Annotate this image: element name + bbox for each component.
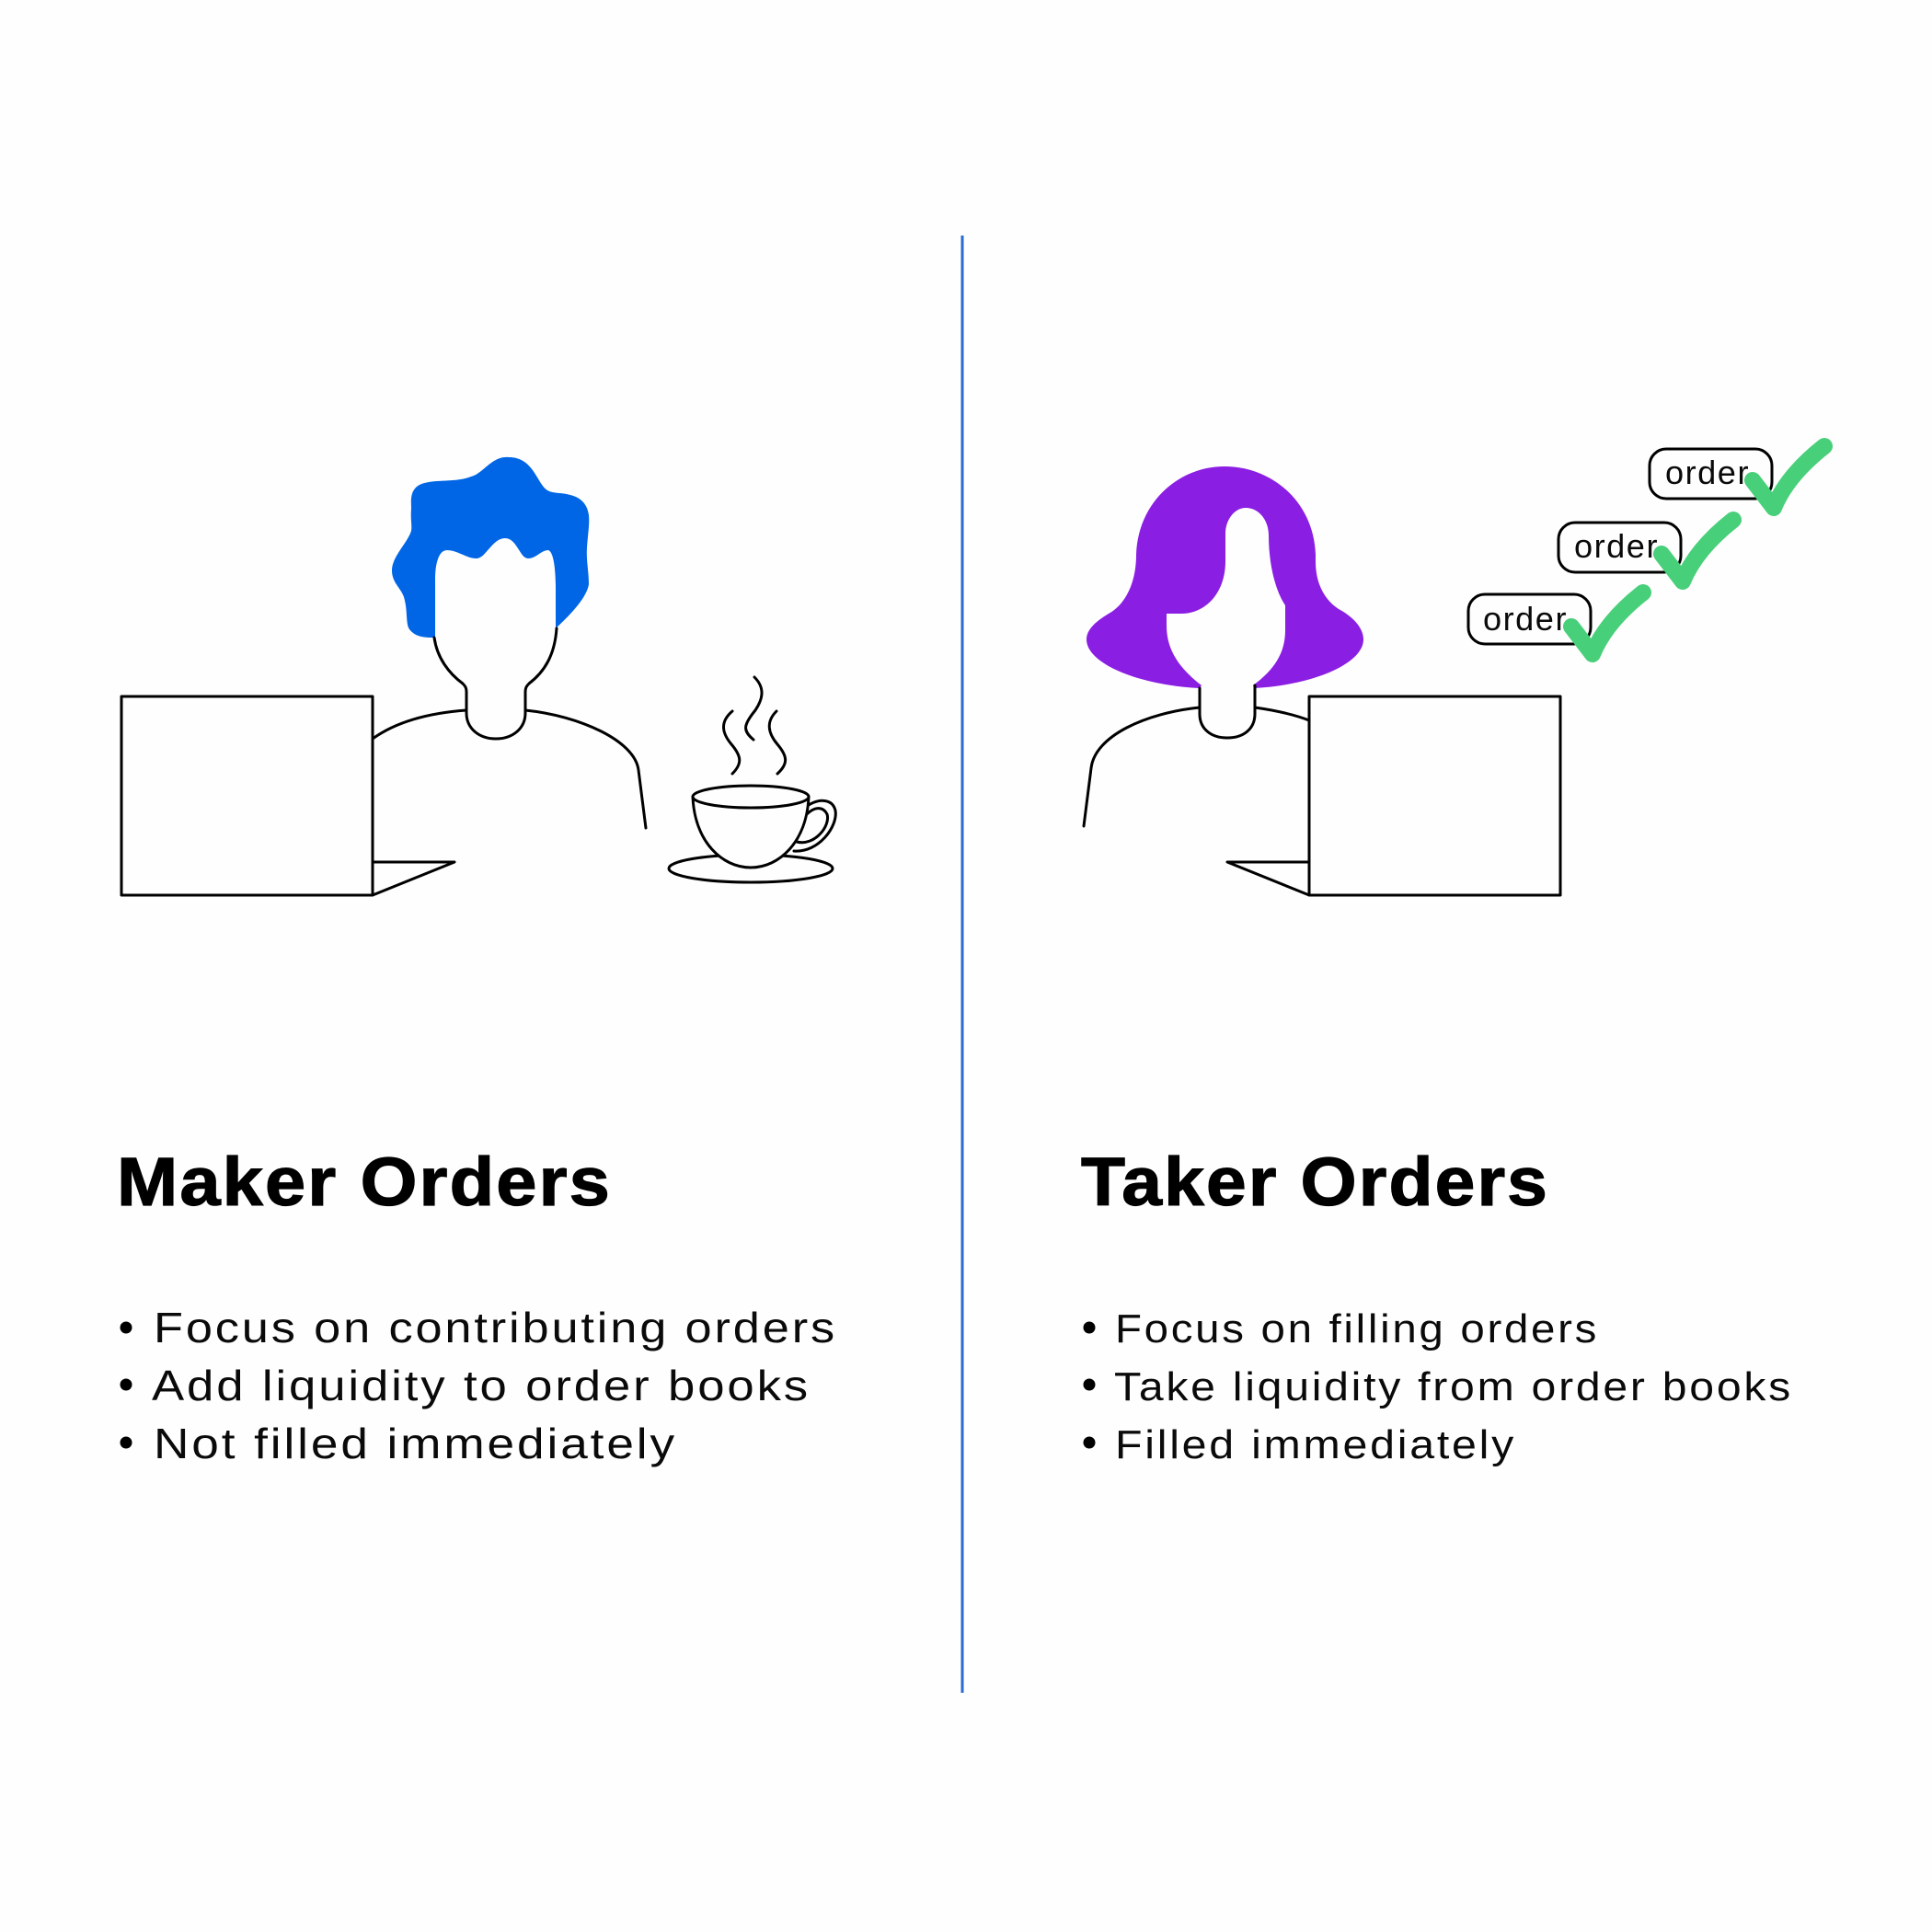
taker shoulders xyxy=(1084,707,1309,826)
order badge 3: order xyxy=(1483,600,1568,638)
maker bullet list xyxy=(120,1304,837,1467)
taker bullet list: Filled immediately xyxy=(1115,1422,1516,1467)
maker bullet list: Not filled immediately xyxy=(154,1420,677,1467)
taker hair xyxy=(1087,466,1363,688)
heading: taker orders: Taker Orders xyxy=(1081,1144,1549,1220)
center divider xyxy=(960,236,964,1693)
order badge 2 xyxy=(1558,520,1733,581)
panel: taker illustration xyxy=(1084,446,1824,895)
maker hair xyxy=(392,457,589,638)
taker bullet list: Focus on filling orders xyxy=(1115,1306,1599,1351)
taker neck xyxy=(1200,685,1255,738)
order badges and checks xyxy=(1468,446,1824,654)
taker laptop xyxy=(1227,696,1560,895)
taker bullet list: Take liquidity from order books xyxy=(1114,1364,1793,1409)
maker face and neck xyxy=(434,628,557,739)
order badge 1 xyxy=(1650,446,1824,508)
heading: maker orders: Maker Orders xyxy=(117,1144,612,1220)
maker bullet list: Focus on contributing orders xyxy=(154,1304,837,1351)
order badge 3 xyxy=(1468,592,1643,654)
order badge 1: order xyxy=(1665,454,1750,491)
coffee cup xyxy=(669,677,835,882)
taker bullet list xyxy=(1084,1306,1793,1467)
maker bullet list: Add liquidity to order books xyxy=(152,1362,811,1409)
maker laptop xyxy=(121,696,454,895)
panel: maker illustration xyxy=(121,457,835,895)
maker shoulders xyxy=(373,710,646,828)
order badge 2: order xyxy=(1574,527,1659,565)
